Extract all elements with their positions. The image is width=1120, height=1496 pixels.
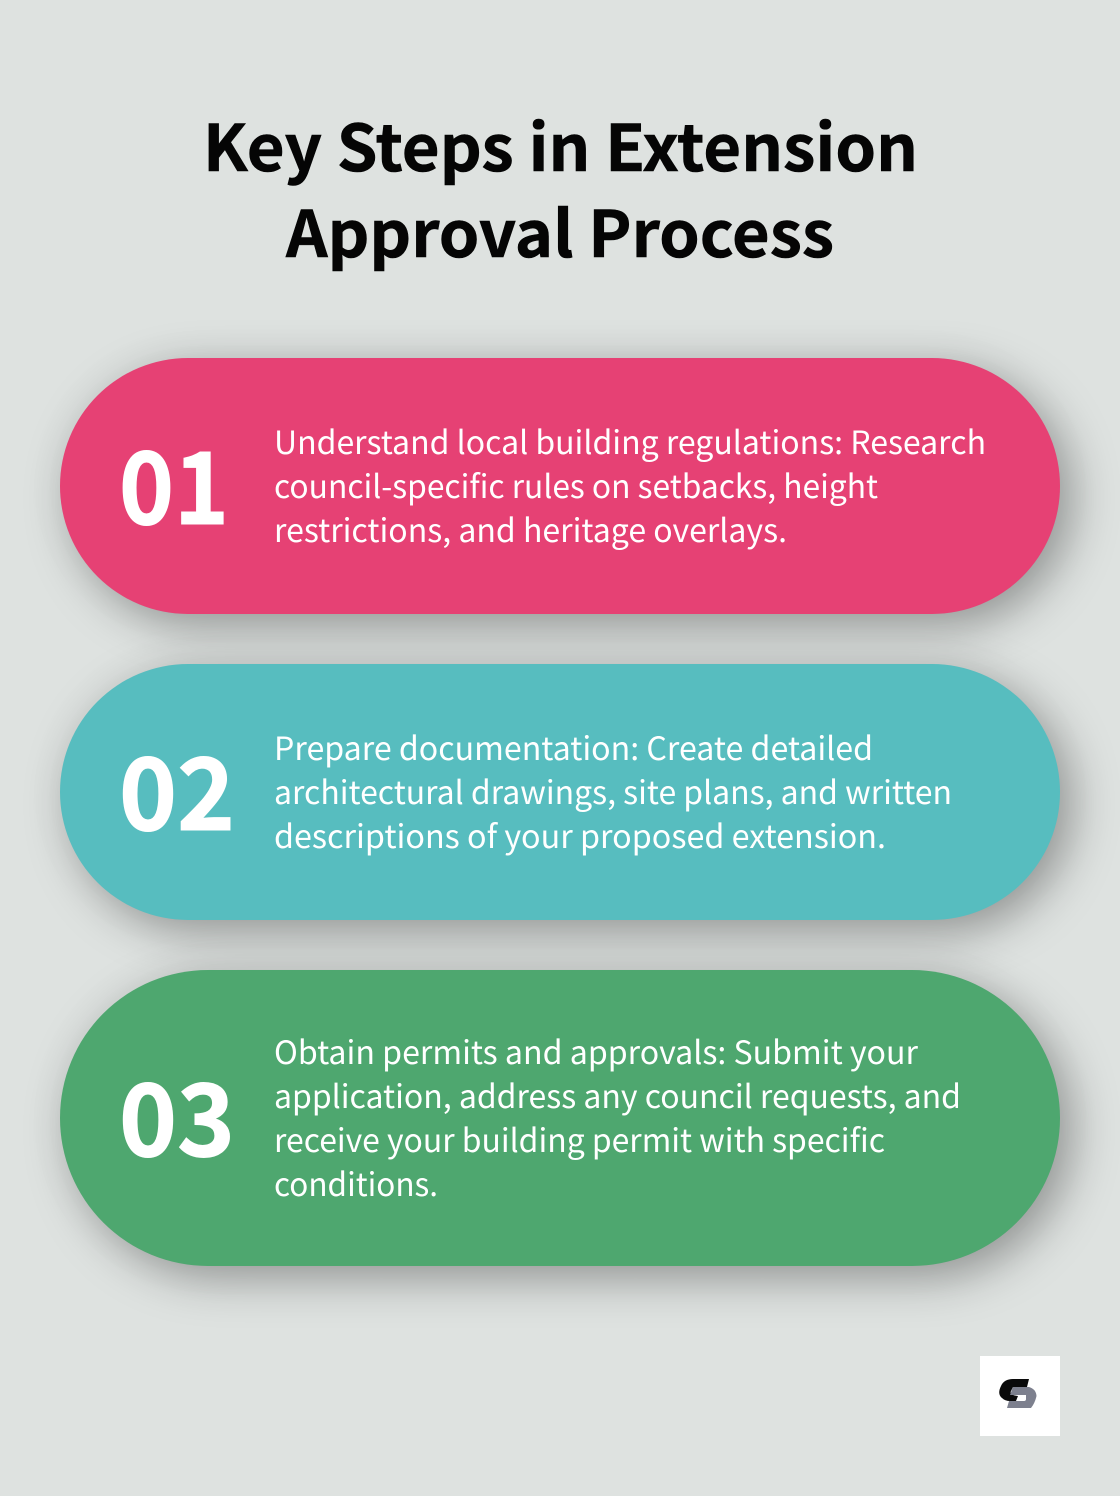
title: Approval Process: [285, 184, 834, 276]
title: [203, 98, 918, 276]
step 3 number: 03: [119, 1040, 235, 1185]
step 1 text: restrictions, and heritage overlays.: [274, 506, 787, 552]
step 3 text: [274, 1028, 961, 1206]
logo badge: [980, 1356, 1060, 1436]
step 2 text: Prepare documentation: Create detailed: [274, 724, 873, 770]
panel: step 1 pill: [60, 358, 1060, 614]
panel: step 2 pill: [60, 664, 1060, 920]
step 2 text: architectural drawings, site plans, and written: [274, 768, 952, 814]
step 1 text: Understand local building regulations: Research: [274, 418, 986, 464]
step 3 text: application, address any council requests, and: [274, 1072, 961, 1118]
title: Key Steps in Extension: [203, 98, 918, 190]
step 1 text: [274, 418, 986, 552]
step 1 number: 01: [119, 408, 229, 553]
step 2 text: descriptions of your proposed extension.: [274, 812, 886, 858]
panel: step 3 pill: [60, 970, 1060, 1266]
step 2 number: 02: [119, 714, 235, 859]
step 3 text: receive your building permit with specific: [274, 1116, 885, 1162]
step 1 text: council-specific rules on setbacks, height: [274, 462, 878, 508]
step 3 text: Obtain permits and approvals: Submit your: [274, 1028, 919, 1074]
icon: S logo mark: [999, 1379, 1036, 1408]
step 2 text: [274, 724, 952, 858]
step 3 text: conditions.: [274, 1160, 438, 1206]
